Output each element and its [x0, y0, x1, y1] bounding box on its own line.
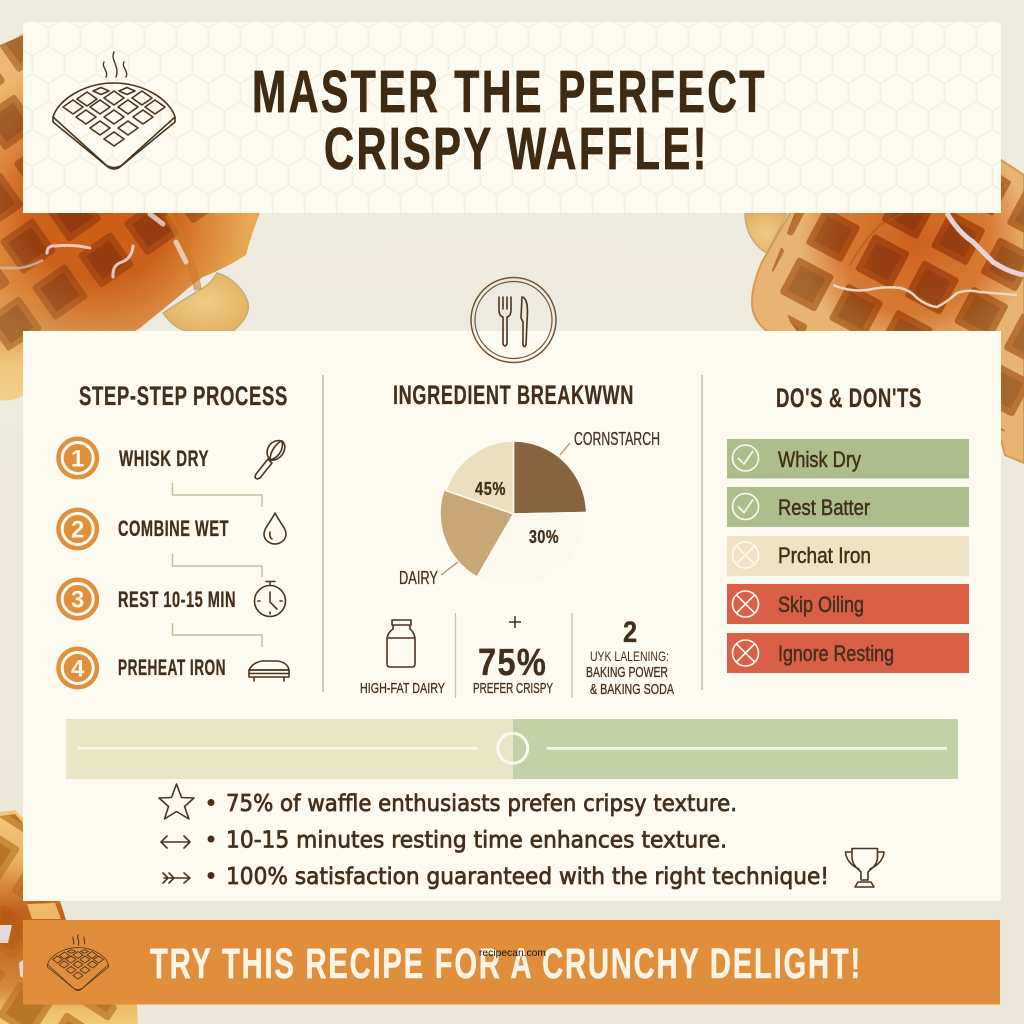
label: dairy: DAIRY — [399, 568, 438, 588]
icon: fletched arrow — [163, 873, 190, 883]
label: cornstarch: CORNSTARCH — [574, 429, 660, 449]
watermark: recipecan.com — [479, 948, 546, 959]
step 4 label: PREHEAT IRON — [118, 655, 226, 680]
pie label 30%: 30% — [529, 527, 559, 547]
main panel — [23, 331, 1001, 901]
connector 3 — [172, 623, 262, 647]
footer banner — [23, 920, 1000, 1004]
label: cornstarch — [560, 429, 660, 455]
connector 1 — [172, 483, 262, 507]
step 1 badge: 1 — [71, 446, 84, 472]
texture comparison bar — [66, 719, 958, 779]
icon: waffle with steam — [53, 52, 175, 169]
step 4 badge: 4 — [71, 656, 85, 682]
key facts list — [159, 784, 884, 890]
heading: do's and don'ts: DO'S & DON'TS — [776, 383, 922, 413]
stat: leavening: 2 — [623, 616, 638, 649]
row: preheat iron — [727, 536, 969, 576]
icon: trophy — [846, 848, 884, 887]
step 4 badge — [56, 646, 99, 690]
row: rest batter — [727, 487, 969, 527]
step 1 badge — [56, 436, 99, 480]
step 3 badge: 3 — [71, 586, 84, 614]
stat: prefer crispy — [473, 616, 553, 697]
heading: ingredient breakdown: INGREDIENT BREAKWWN — [393, 380, 634, 410]
step 2 label: COMBINE WET — [118, 516, 229, 541]
icon: fork and knife in plate — [471, 278, 556, 362]
photo: waffle right — [745, 160, 1024, 463]
icon: milk jar — [387, 620, 415, 667]
icon: waffle small — [48, 935, 108, 990]
icon: timer — [254, 582, 286, 616]
connector 2 — [172, 554, 262, 577]
icon: double arrow — [161, 836, 190, 848]
stat: leavening: & BAKING SODA — [590, 681, 674, 698]
stat: prefer crispy: 75% — [478, 642, 547, 684]
icon: water drop — [264, 513, 286, 544]
stat: leavening: UYK LALENING: — [590, 648, 669, 664]
icon: waffle iron — [249, 661, 289, 681]
stat: prefer crispy: PREFER CRISPY — [473, 680, 553, 697]
row: whisk dry — [727, 439, 969, 478]
photo: waffle bottom left — [0, 810, 138, 1024]
step 1 label: WHISK DRY — [119, 446, 209, 471]
row: skip oiling: Skip Oiling — [778, 592, 864, 617]
row: whisk dry: Whisk Dry — [778, 447, 861, 472]
stat: leavening: BAKING POWER — [586, 664, 668, 681]
column dividers — [323, 375, 702, 692]
panel: ingredient breakdown — [360, 380, 674, 698]
step 2 badge — [56, 508, 99, 550]
icon: star — [159, 784, 194, 819]
row: preheat iron: Prchat Iron — [778, 543, 871, 568]
icon: whisk — [255, 441, 285, 479]
header panel — [23, 22, 1001, 213]
step 3 badge — [56, 578, 99, 620]
row: ignore resting: Ignore Resting — [778, 641, 894, 666]
row: skip oiling — [727, 584, 969, 624]
stat: high-fat dairy — [360, 620, 445, 697]
stat label: high-fat dairy: HIGH-FAT DAIRY — [360, 680, 445, 697]
title — [252, 59, 767, 182]
panel: do's and don'ts — [727, 383, 969, 673]
step 2 badge: 2 — [71, 516, 84, 544]
row: rest batter: Rest Batter — [778, 495, 870, 520]
title: CRISPY WAFFLE! — [324, 116, 709, 182]
fact 2: 10-15 minutes resting time enhances texture. — [226, 826, 727, 854]
photo: waffle top left — [0, 25, 260, 400]
fact 3: 100% satisfaction guaranteed with the right technique! — [226, 862, 829, 890]
stat dividers — [456, 613, 572, 698]
stat: leavening — [586, 616, 674, 698]
step 3 label: REST 10-15 MIN — [118, 587, 236, 612]
heading: step process: STEP-STEP PROCESS — [79, 381, 288, 411]
fact 1: 75% of waffle enthusiasts prefen cripsy texture. — [226, 789, 737, 817]
panel: step process — [56, 381, 289, 690]
pie label 45%: 45% — [475, 479, 506, 499]
title: MASTER THE PERFECT — [252, 59, 767, 125]
pie chart — [440, 441, 587, 587]
row: ignore resting — [727, 633, 969, 673]
